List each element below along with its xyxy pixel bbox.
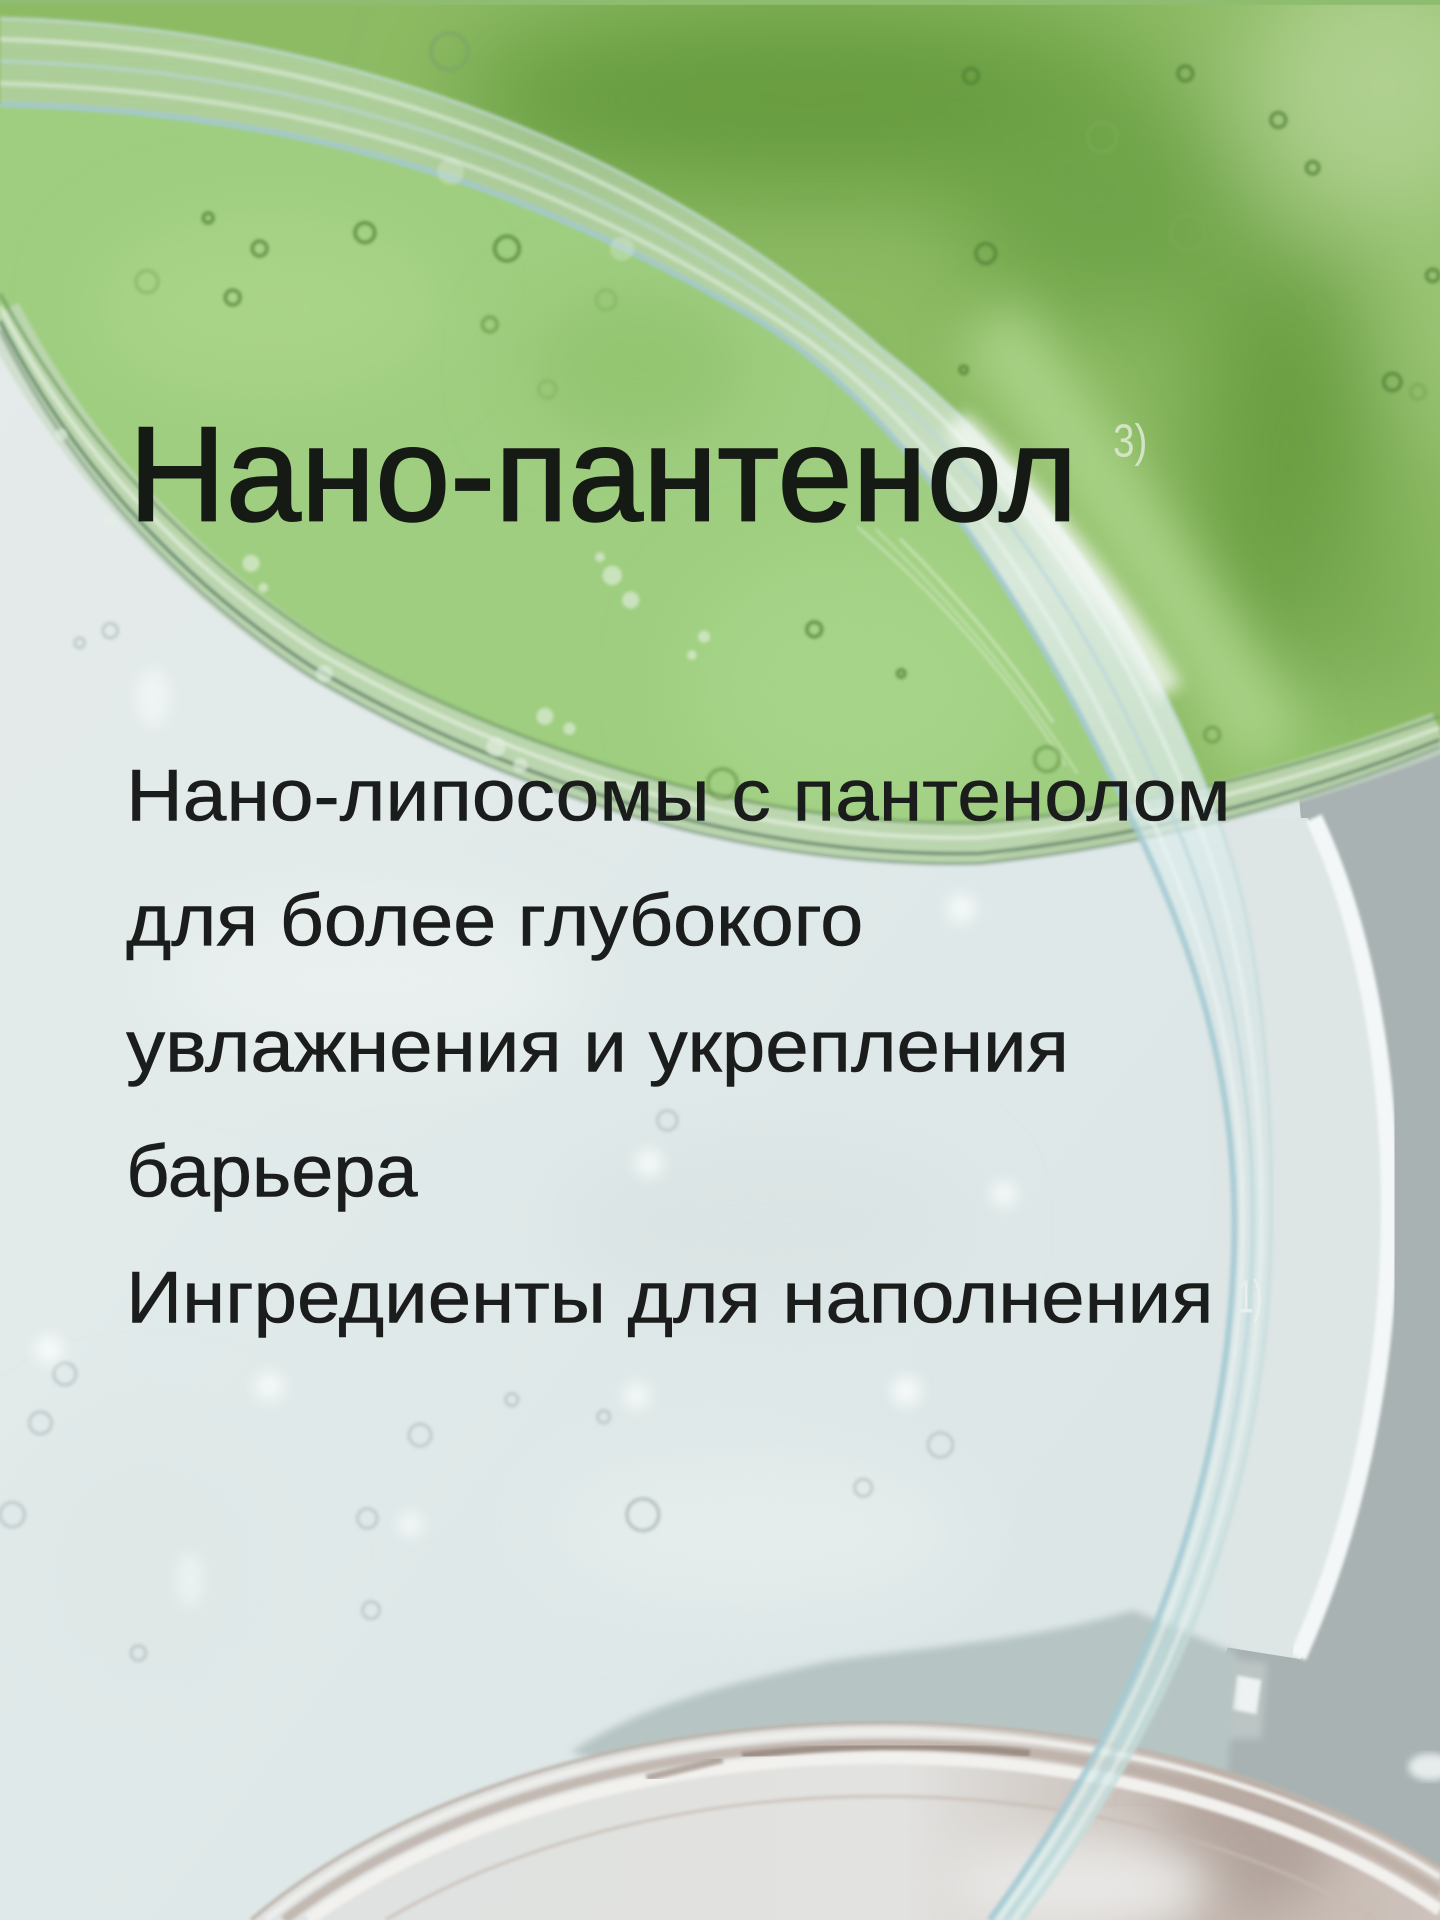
- panel: grey table at right: [1102, 735, 1440, 1920]
- pale bubbles on rims: [55, 158, 710, 773]
- line 2: для более глубокого: [126, 878, 863, 961]
- bubbles in clear gel: [0, 623, 953, 1660]
- bottom dish with beige liquid: [251, 1723, 1440, 1920]
- line 5: Ингредиенты для наполнения: [126, 1255, 1213, 1338]
- line 3: увлажнения и укрепления: [126, 1004, 1069, 1087]
- mottled gel texture: [12, 906, 967, 1714]
- light green lens inside upper rim: [0, 104, 1120, 858]
- dark green shading: [440, 5, 1440, 686]
- green dish lower rim: [0, 294, 1440, 864]
- line 4: барьера: [126, 1129, 418, 1212]
- shadow under lower dish: [571, 1610, 1237, 1812]
- light band outside glass rim: [986, 324, 1273, 753]
- green gel dish: [0, 0, 1440, 864]
- line 1: Нано-липосомы с пантенолом: [126, 753, 1231, 836]
- body text: [126, 753, 1231, 1338]
- footnote mark 1): 1): [1238, 1271, 1262, 1323]
- top highlight strip: [0, 0, 1440, 5]
- footnote mark 3): 3): [1113, 415, 1147, 467]
- soft white highlights: [34, 669, 1016, 1607]
- panel: white plate edge: [1163, 818, 1440, 1780]
- bubbles in green gel: [136, 33, 1439, 798]
- title: Нано-пантенол: [129, 398, 1078, 549]
